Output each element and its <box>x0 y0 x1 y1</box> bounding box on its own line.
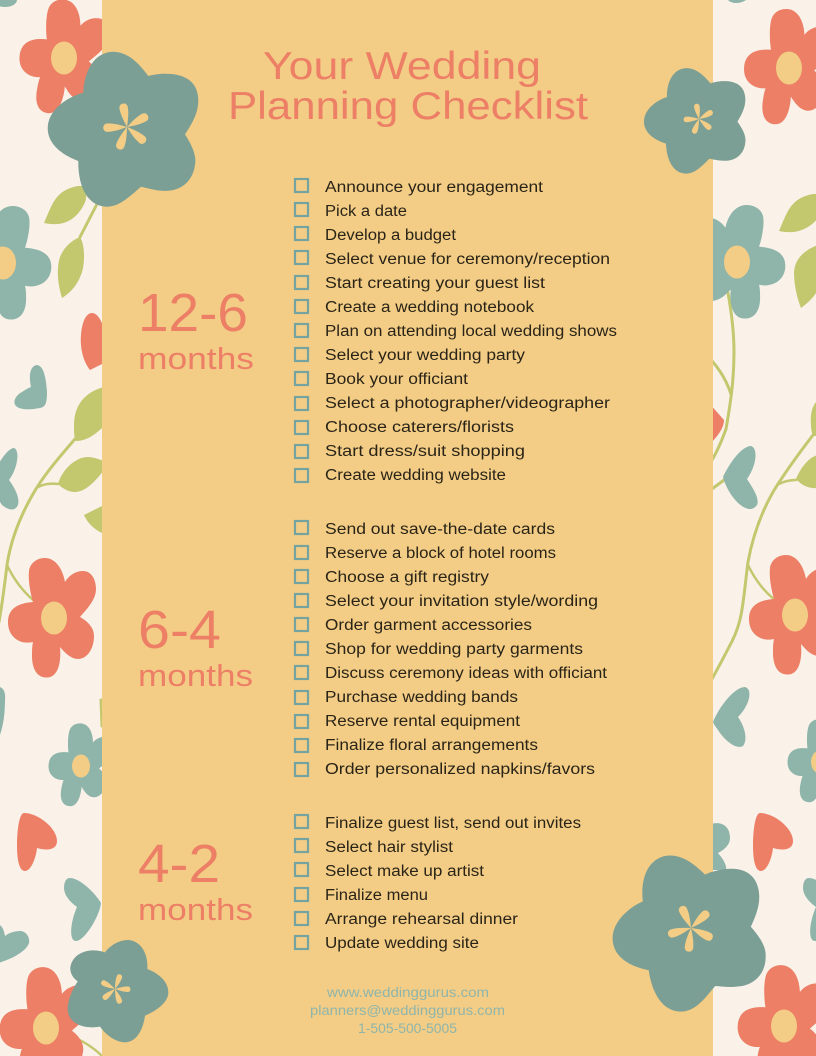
checklist: 6-4 months: Order personalized napkins/favors <box>325 761 595 778</box>
checklist: 6-4 months: Order garment accessories <box>325 617 532 634</box>
checklist: 12-6 months: Create wedding website <box>325 467 506 484</box>
title: Your Wedding <box>263 45 541 88</box>
checklist: 6-4 months: Purchase wedding bands <box>325 689 518 706</box>
checklist: 12-6 months: Start dress/suit shopping <box>325 443 525 460</box>
checklist: 6-4 months: Reserve rental equipment <box>325 713 521 730</box>
checklist: 12-6 months: Select venue for ceremony/reception <box>325 251 610 268</box>
title: Planning Checklist <box>228 85 588 128</box>
section label: 6-4 months: 6-4 <box>138 600 221 660</box>
footer contact details: www.weddinggurus.com <box>326 985 489 1000</box>
checklist: 6-4 months: Finalize floral arrangements <box>325 737 538 754</box>
flower: top right <box>641 65 749 176</box>
checklist: 6-4 months <box>295 521 608 778</box>
section label: 4-2 months <box>138 834 253 927</box>
checklist: 12-6 months: Develop a budget <box>325 227 457 244</box>
checklist: 4-2 months: Select make up artist <box>325 863 485 880</box>
checklist: 12-6 months: Select your wedding party <box>325 347 525 364</box>
flower: bottom left <box>68 940 168 1042</box>
checklist: 4-2 months: Select hair stylist <box>325 839 454 856</box>
floral pattern: right margin <box>693 0 816 1056</box>
checklist: 12-6 months: Announce your engagement <box>325 179 544 196</box>
checklist: 6-4 months: Discuss ceremony ideas with officiant <box>325 665 608 682</box>
checklist: 4-2 months <box>295 815 581 952</box>
section label: 4-2 months: 4-2 <box>138 834 220 894</box>
checklist: 6-4 months: Reserve a block of hotel rooms <box>325 545 556 562</box>
checklist: 6-4 months: Send out save-the-date cards <box>325 521 555 538</box>
checklist: 4-2 months: Finalize menu <box>325 887 428 904</box>
section label: 12-6 months: 12-6 <box>138 283 248 343</box>
checklist: 4-2 months: Update wedding site <box>325 935 479 952</box>
checklist: 12-6 months: Choose caterers/florists <box>325 419 514 436</box>
checklist: 12-6 months: Create a wedding notebook <box>325 299 534 316</box>
checklist: 12-6 months: Select a photographer/videographer <box>325 395 610 412</box>
section label: 4-2 months: months <box>138 892 253 927</box>
checklist: 6-4 months: Select your invitation style/wording <box>325 593 598 610</box>
section label: 12-6 months <box>138 283 254 376</box>
checklist: 12-6 months: Book your officiant <box>325 371 469 388</box>
checklist: 6-4 months: Choose a gift registry <box>325 569 489 586</box>
checklist: 4-2 months: Finalize guest list, send out invites <box>325 815 581 832</box>
checklist: 12-6 months: Plan on attending local wedding shows <box>325 323 617 340</box>
section label: 12-6 months: months <box>138 341 254 376</box>
checklist: 12-6 months: Pick a date <box>325 203 407 220</box>
footer contact details: 1-505-500-5005 <box>358 1021 457 1036</box>
section label: 6-4 months <box>138 600 253 693</box>
panel: central yellow column <box>102 0 713 1056</box>
checklist: 6-4 months: Shop for wedding party garments <box>325 641 583 658</box>
footer contact details: planners@weddinggurus.com <box>310 1003 505 1018</box>
footer contact details <box>310 985 505 1036</box>
flower: bottom right large <box>601 842 776 1021</box>
section label: 6-4 months: months <box>138 658 253 693</box>
checklist: 4-2 months: Arrange rehearsal dinner <box>325 911 518 928</box>
title <box>228 45 588 128</box>
checklist: 12-6 months <box>295 179 617 484</box>
flower: top left large <box>48 52 198 207</box>
checklist: 12-6 months: Start creating your guest list <box>325 275 546 292</box>
floral pattern: left margin <box>0 0 117 1056</box>
